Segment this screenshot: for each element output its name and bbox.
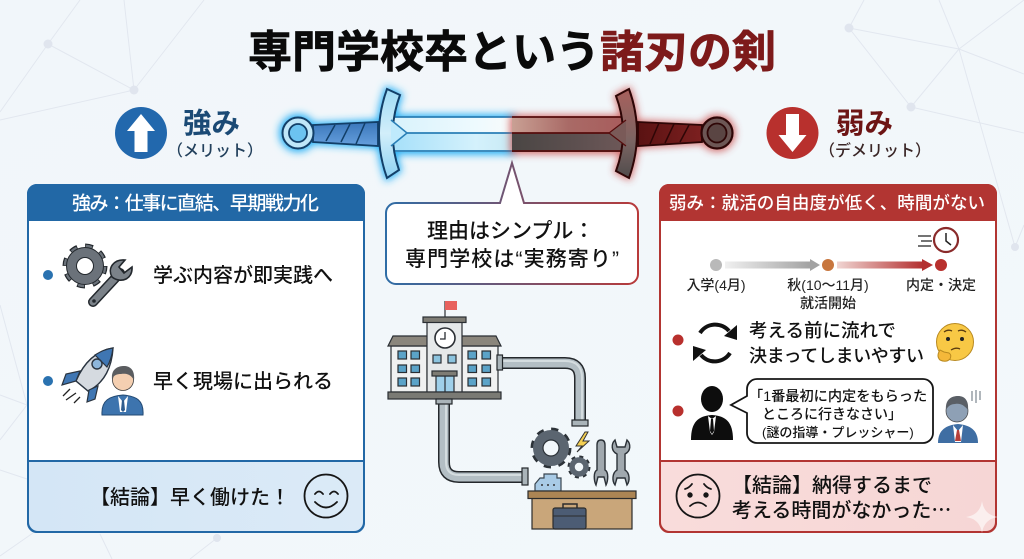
pipe: lower <box>436 399 528 485</box>
icon: fast clock <box>918 228 958 252</box>
item: pressure from adviser <box>672 379 980 443</box>
icon: wrench left <box>594 440 608 485</box>
heading: weakness: （デメリット） <box>819 141 931 160</box>
icon: wrench right <box>612 440 630 485</box>
item: practical learning <box>43 248 333 303</box>
icon: worried employee <box>938 390 980 443</box>
item: decided by momentum: 考える前に流れで <box>749 320 896 341</box>
icon: small gear <box>570 458 588 476</box>
item: practical learning: 学ぶ内容が即実践へ <box>153 264 333 287</box>
icon: gear and wrench <box>66 248 132 303</box>
conclusion: worked early <box>28 461 364 532</box>
panel header: weaknesses <box>659 184 997 221</box>
speech bubble <box>731 379 933 443</box>
timeline: job hunting schedule: 内定・決定 <box>906 277 976 293</box>
illustration: school piped to workplace <box>388 301 636 529</box>
conclusion: no time to think: 【結論】納得するまで <box>732 474 932 497</box>
callout: reason: 専門学校は“実務寄り” <box>405 248 619 271</box>
icon: lightning bolt <box>576 432 589 452</box>
item: early field work <box>43 348 333 415</box>
icon: large gear <box>534 431 568 465</box>
speech bubble: ところに行きなさい」 <box>762 406 902 422</box>
speech bubble: 「1番最初に内定をもらった <box>749 389 927 405</box>
timeline: job hunting schedule: 入学(4月) <box>686 277 746 293</box>
icon: double-edged sword <box>282 89 734 178</box>
panel header: strengths: 強み：仕事に直結、早期戦力化 <box>72 192 319 214</box>
title: 諸刃の剣 <box>600 28 776 77</box>
heading: strength: 強み <box>183 108 240 140</box>
item: decided by momentum <box>672 320 974 366</box>
icon: rocket and businessperson <box>62 348 143 415</box>
icon: sad face <box>676 474 720 518</box>
panel header: weaknesses: 弱み：就活の自由度が低く、時間がない <box>669 193 985 213</box>
heading: weakness: 弱み <box>836 108 893 140</box>
callout: reason: 理由はシンプル： <box>427 220 594 243</box>
speech bubble: (謎の指導・プレッシャー) <box>762 425 914 440</box>
heading: strength <box>167 108 263 160</box>
panel: strengths <box>27 184 365 532</box>
panel header: strengths <box>27 184 365 221</box>
timeline: job hunting schedule: 秋(10～11月) <box>787 277 869 293</box>
icon: up arrow strength <box>115 107 167 159</box>
item: early field work: 早く現場に出られる <box>153 370 333 393</box>
conclusion: worked early: 【結論】早く働けた！ <box>90 486 290 509</box>
item: decided by momentum: 決まってしまいやすい <box>749 346 924 366</box>
icon: school building <box>388 301 501 399</box>
icon: desk with toolbox <box>528 491 636 529</box>
icon: thinking face <box>936 324 974 361</box>
conclusion: no time to think: 考える時間がなかった… <box>732 494 951 523</box>
pipe: upper <box>497 355 588 426</box>
panel: weaknesses <box>659 184 997 532</box>
icon: down arrow weakness <box>766 107 818 159</box>
heading: weakness <box>819 108 931 160</box>
icon: machine <box>535 474 561 491</box>
sword red half <box>512 89 734 178</box>
timeline: job hunting schedule <box>686 228 976 311</box>
sword blue half <box>282 89 512 178</box>
heading: strength: （メリット） <box>167 142 263 160</box>
icon: adviser silhouette <box>691 386 733 440</box>
timeline: job hunting schedule: 就活開始 <box>800 295 856 311</box>
title: 専門学校卒という <box>248 28 600 77</box>
icon: cycle arrows <box>693 325 737 361</box>
conclusion: no time to think <box>660 461 996 532</box>
callout: reason <box>386 163 638 284</box>
icon: smiley face <box>304 474 348 518</box>
title <box>248 28 776 77</box>
